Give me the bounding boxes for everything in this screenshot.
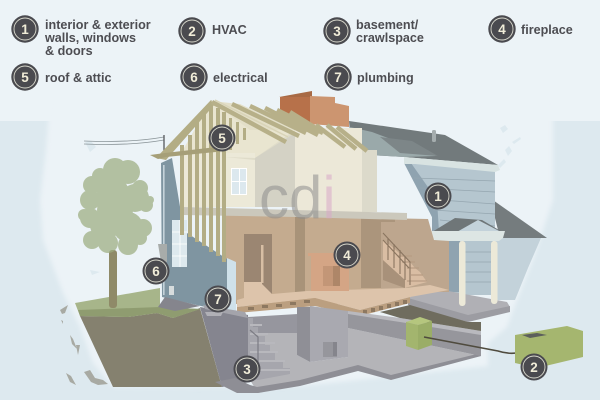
marker 3: 3 [243,362,251,377]
legend 3 [323,17,424,45]
legend 1 [11,15,151,58]
HVAC pipe [424,337,522,353]
marker 3 [234,356,260,382]
marker 7: 7 [214,292,222,307]
legend 7: plumbing [357,71,414,85]
main house [150,91,547,393]
legend 6 [180,63,268,91]
marker 6 [142,258,170,284]
legend 7: 7 [334,70,342,85]
floor and joists [237,282,449,316]
legend 1: walls, windows [44,31,136,45]
legend 2: 2 [188,24,196,39]
marker 4: 4 [343,248,351,263]
legend 4: 4 [498,22,506,37]
tree [78,158,154,308]
legend 1: interior & exterior [45,18,151,32]
legend 5: roof & attic [45,71,111,85]
chimney [279,91,349,127]
legend 6: electrical [213,71,268,85]
basement [200,305,481,393]
marker 5 [208,124,236,152]
marker 5: 5 [218,131,226,146]
right roof [349,121,547,300]
legend 2: HVAC [212,23,247,37]
legend 3: basement/ [356,18,419,32]
legend [11,15,573,91]
legend 3: 3 [333,24,341,39]
marker 2: 2 [530,360,538,375]
porch [408,218,510,322]
legend 4 [488,15,573,43]
lower floor walls [183,207,449,304]
marker 4 [334,242,360,268]
marker 6: 6 [152,264,160,279]
legend 6: 6 [190,70,198,85]
interior stairs [383,233,427,288]
framing studs [150,100,246,262]
legend 4: fireplace [521,23,573,37]
legend 1: 1 [21,22,29,37]
legend 5: 5 [21,70,29,85]
legend 2 [178,17,247,45]
legend 5 [11,63,111,91]
upper floor walls [180,101,377,212]
watermark: cdi [259,164,336,231]
legend 3: crawlspace [356,31,424,45]
marker 1 [424,182,452,210]
basement stairs [205,312,290,380]
marker 1: 1 [434,189,442,204]
marker 7 [204,286,232,312]
siding wing [404,157,500,232]
HVAC indoor unit [406,317,432,350]
legend 1: & doors [45,44,93,58]
power line [84,135,164,158]
HVAC outdoor unit [515,326,583,368]
ground [60,288,222,387]
fireplace [308,253,349,291]
marker 2 [520,354,548,380]
roof rafters [211,100,367,151]
side wall [158,158,236,315]
legend 7 [324,63,414,91]
